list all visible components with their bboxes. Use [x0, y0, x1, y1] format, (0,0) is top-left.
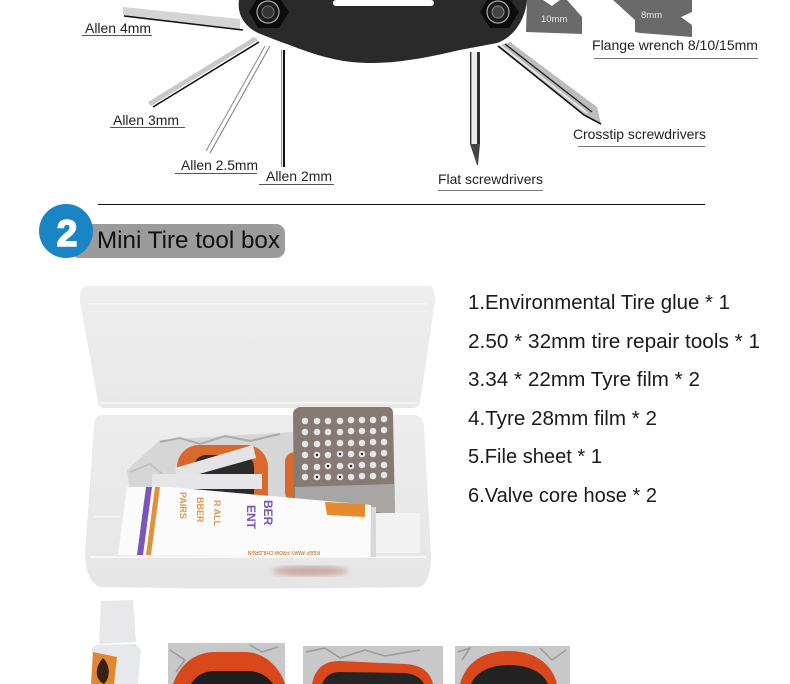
icon: number badge: [39, 204, 93, 258]
heading pill: [70, 224, 285, 258]
valve core hoses: [152, 445, 262, 489]
contents list: 6.Valve core hose * 2: [468, 485, 657, 507]
label: Flange wrench: Flange wrench 8/10/15mm: [592, 37, 758, 53]
icon: right bolt: [480, 0, 519, 28]
shadow under tube: [272, 566, 348, 576]
label: Allen 3mm: Allen 3mm: [113, 112, 179, 128]
icon: Allen 3mm key: [148, 37, 259, 107]
glue tube: [118, 487, 420, 557]
file sheet: [293, 407, 395, 515]
foil packet: [127, 432, 298, 500]
contents list: [468, 292, 760, 507]
glue tube: PAIRS: [178, 492, 188, 519]
section heading: [39, 204, 285, 258]
photo: open plastic box with repair kit: [80, 286, 435, 588]
contents list: 3.34 * 22mm Tyre film * 2: [468, 369, 700, 391]
label: Allen 2.5mm: Allen 2.5mm: [181, 157, 258, 173]
icon: Allen 2.5mm key: [206, 46, 270, 153]
photo: patch 2: [303, 646, 443, 684]
multi-tool illustration: [123, 0, 692, 167]
icon: left bolt: [249, 0, 289, 28]
photo: patch 1: [168, 643, 285, 684]
label: Flat screwdrivers: Flat screwdrivers: [438, 171, 543, 187]
label: Allen 4mm: Allen 4mm: [85, 20, 151, 36]
icon: number badge: 2: [57, 213, 77, 254]
icon: crosstip screwdriver: [498, 42, 601, 124]
photo: small glue tube: [91, 600, 141, 684]
icon: flat screwdriver: [470, 52, 480, 165]
box base: [85, 415, 431, 588]
glue tube: KEEP AWAY FROM CHILDREN: [247, 549, 320, 555]
glue tube: BBER: [195, 497, 205, 523]
glue tube: ENT: [244, 505, 258, 530]
label: Allen 2mm: Allen 2mm: [266, 168, 332, 184]
icon: flange wrench: 10mm: [541, 14, 567, 25]
photo: patch 3: [455, 646, 570, 684]
glue tube: BER: [261, 500, 275, 526]
heading text: Mini Tire tool box: [97, 227, 280, 254]
icon: flange wrench: 8mm: [641, 10, 662, 21]
icon: Allen 2mm key: [281, 50, 285, 167]
orange patch: [177, 445, 315, 517]
icon: black tool body: [239, 0, 527, 63]
glue tube: R ALL: [212, 500, 222, 527]
contents list: 2.50 * 32mm tire repair tools * 1: [468, 331, 760, 353]
contents list: 4.Tyre 28mm film * 2: [468, 408, 657, 430]
label: Crosstip screwdrivers: Crosstip screwdrivers: [573, 126, 706, 142]
icon: flange wrench: [526, 0, 692, 37]
contents list: 5.File sheet * 1: [468, 446, 602, 468]
box lid: [80, 286, 435, 408]
icon: Allen 4mm key: [123, 7, 243, 30]
contents list: 1.Environmental Tire glue * 1: [468, 292, 730, 314]
